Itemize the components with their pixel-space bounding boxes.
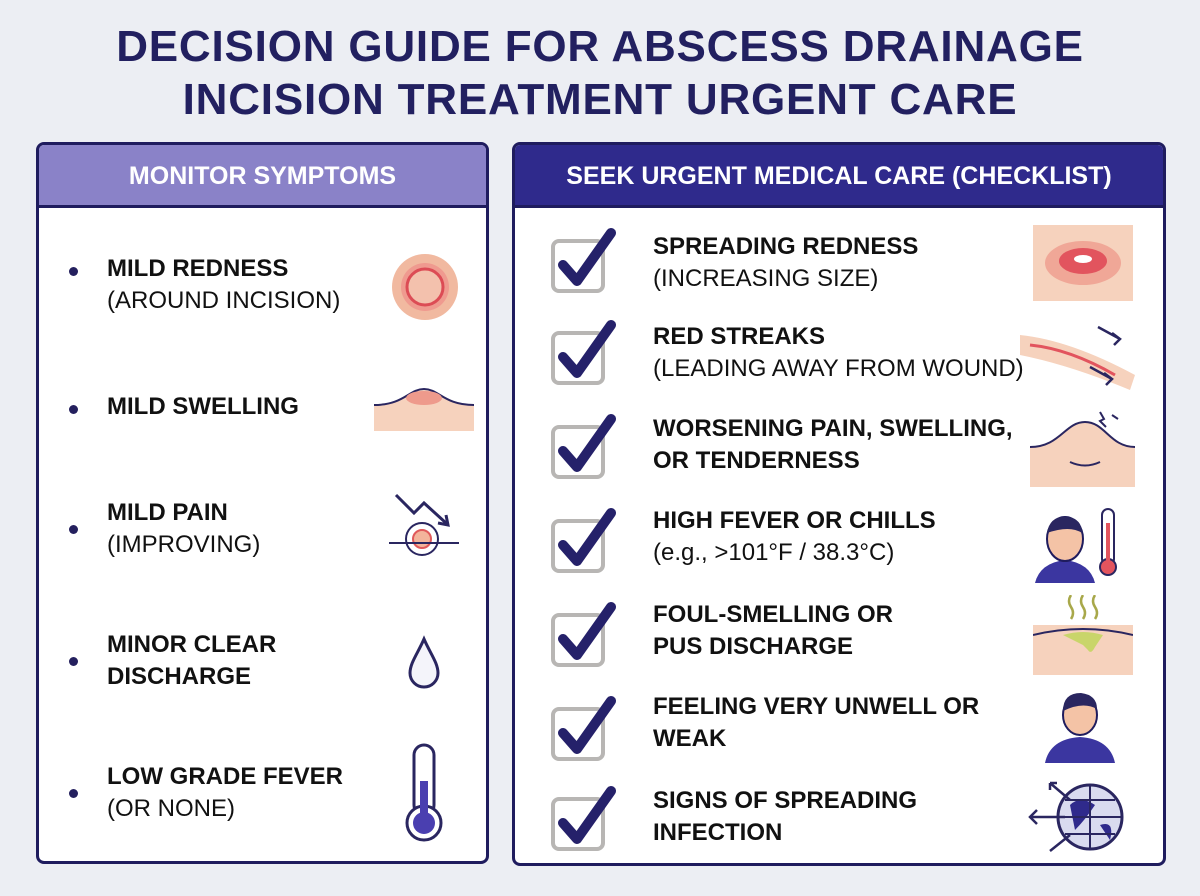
icon: fever person bbox=[1035, 508, 1117, 583]
item: spreading redness: SPREADING REDNESS bbox=[653, 233, 918, 260]
icon: worsening pain bbox=[1030, 412, 1135, 487]
item: spreading infection: INFECTION bbox=[653, 819, 782, 846]
icon: globe bbox=[1028, 782, 1124, 852]
icon: thermometer bbox=[406, 744, 442, 842]
icon: drop bbox=[408, 635, 440, 688]
item: mild redness bbox=[69, 255, 340, 314]
item: minor clear discharge bbox=[69, 631, 276, 690]
icon: unwell person bbox=[1045, 693, 1115, 763]
item: feeling unwell: FEELING VERY UNWELL OR bbox=[653, 693, 979, 720]
item: low grade fever: (OR NONE) bbox=[107, 795, 235, 822]
item: mild swelling: MILD SWELLING bbox=[107, 393, 299, 420]
item: red streaks bbox=[551, 320, 1024, 385]
item: worsening pain bbox=[551, 414, 1013, 479]
item: spreading infection: SIGNS OF SPREADING bbox=[653, 787, 917, 814]
item: mild pain: (IMPROVING) bbox=[107, 531, 260, 558]
item: worsening pain: WORSENING PAIN, SWELLING, bbox=[653, 415, 1013, 442]
title: INCISION TREATMENT URGENT CARE bbox=[183, 75, 1017, 124]
item: red streaks: (LEADING AWAY FROM WOUND) bbox=[653, 355, 1024, 382]
item: foul-smelling bbox=[551, 601, 893, 667]
item: minor clear discharge: MINOR CLEAR bbox=[107, 631, 276, 658]
item: low grade fever: LOW GRADE FEVER bbox=[107, 763, 343, 790]
icon: redness circle bbox=[392, 254, 458, 320]
title bbox=[116, 22, 1084, 124]
item: worsening pain: OR TENDERNESS bbox=[653, 447, 860, 474]
item: spreading infection bbox=[551, 786, 917, 851]
item: feeling unwell bbox=[551, 693, 979, 761]
icon: swelling bbox=[374, 388, 474, 431]
checklist items bbox=[551, 228, 1024, 851]
item: feeling unwell: WEAK bbox=[653, 725, 726, 752]
panel: seek urgent care bbox=[512, 142, 1166, 866]
item: high fever: (e.g., >101°F / 38.3°C) bbox=[653, 539, 894, 566]
item: mild pain bbox=[69, 499, 260, 558]
item: high fever: HIGH FEVER OR CHILLS bbox=[653, 507, 936, 534]
heading: seek urgent care bbox=[515, 145, 1163, 208]
icon: red streaks bbox=[1020, 326, 1135, 390]
item: foul-smelling: PUS DISCHARGE bbox=[653, 633, 853, 660]
item: spreading redness: (INCREASING SIZE) bbox=[653, 265, 878, 292]
icon: spreading redness bbox=[1033, 225, 1133, 301]
item: spreading redness bbox=[551, 228, 918, 293]
item: low grade fever bbox=[69, 763, 343, 822]
heading: monitor symptoms bbox=[39, 145, 486, 208]
item: foul-smelling: FOUL-SMELLING OR bbox=[653, 601, 893, 628]
item: mild redness: MILD REDNESS bbox=[107, 255, 288, 282]
icon: pain target bbox=[389, 494, 459, 556]
title: DECISION GUIDE FOR ABSCESS DRAINAGE bbox=[116, 22, 1084, 71]
item: mild redness: (AROUND INCISION) bbox=[107, 287, 340, 314]
heading: seek urgent care: SEEK URGENT MEDICAL CARE (CHECKLIST) bbox=[566, 162, 1112, 190]
item: mild pain: MILD PAIN bbox=[107, 499, 228, 526]
icon: pus discharge bbox=[1033, 595, 1133, 675]
item: high fever bbox=[551, 507, 936, 573]
item: minor clear discharge: DISCHARGE bbox=[107, 663, 251, 690]
heading: monitor symptoms: MONITOR SYMPTOMS bbox=[129, 162, 396, 190]
panel: monitor symptoms bbox=[36, 142, 489, 864]
item: red streaks: RED STREAKS bbox=[653, 323, 825, 350]
